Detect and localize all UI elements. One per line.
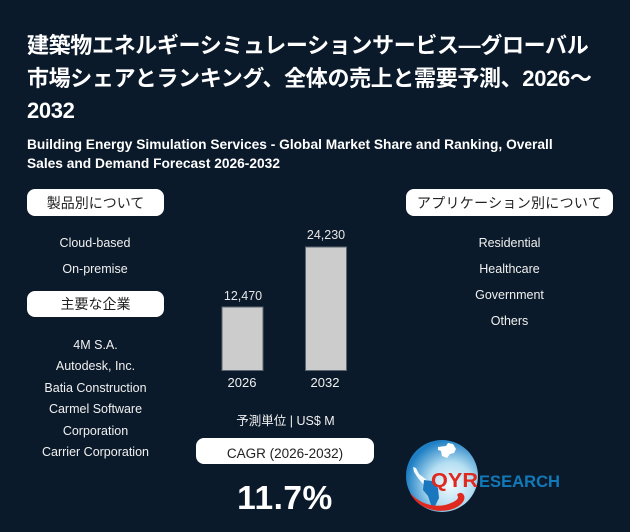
company list: Corporation bbox=[63, 424, 128, 438]
subtitle: Building Energy Simulation Services - Global Market Share and Ranking, Overall bbox=[27, 136, 553, 152]
title: 2032 bbox=[27, 98, 75, 123]
bar: 2032: 24,230 bbox=[307, 228, 345, 242]
bar chart bbox=[222, 228, 347, 390]
bar: 2032 bbox=[306, 228, 346, 390]
product: on-premise: On-premise bbox=[62, 262, 128, 276]
title: 市場シェアとランキング、全体の売上と需要予測、2026～ bbox=[27, 66, 592, 90]
bar: 2032: 2032 bbox=[311, 375, 339, 390]
company list: Autodesk, Inc. bbox=[56, 359, 135, 373]
CAGR value: 11.7% bbox=[237, 480, 333, 517]
pill: CAGR bbox=[196, 438, 374, 464]
globe bbox=[406, 440, 478, 512]
bar: 2026 bbox=[222, 289, 263, 390]
pill: by product: 製品別について bbox=[47, 195, 144, 211]
logo: QYResearch: ESEARCH bbox=[479, 473, 560, 491]
subtitle bbox=[27, 136, 553, 171]
pill: CAGR: CAGR (2026-2032) bbox=[227, 446, 343, 461]
pill: key companies: 主要な企業 bbox=[60, 296, 130, 312]
application: healthcare: Healthcare bbox=[479, 262, 540, 276]
product list bbox=[60, 236, 130, 276]
company list: Carmel Software bbox=[49, 402, 142, 416]
company list bbox=[42, 338, 149, 459]
logo: QYResearch bbox=[406, 440, 560, 512]
pill: by application: アプリケーション別について bbox=[417, 195, 602, 211]
title: 建築物エネルギーシミュレーションサービス—グローバル bbox=[27, 33, 588, 58]
pill: key companies bbox=[27, 291, 164, 317]
forecast unit: 予測単位 | US$ M bbox=[236, 414, 335, 428]
title bbox=[27, 33, 592, 123]
bar: 2026: 2026 bbox=[228, 375, 256, 390]
subtitle: Sales and Demand Forecast 2026-2032 bbox=[27, 156, 280, 171]
application: others: Others bbox=[491, 314, 528, 328]
company list: 4M S.A. bbox=[73, 338, 118, 352]
application: residential: Residential bbox=[479, 236, 540, 250]
application: government: Government bbox=[475, 288, 544, 302]
company list: Batia Construction bbox=[44, 380, 147, 394]
application list bbox=[475, 236, 544, 328]
company list: Carrier Corporation bbox=[42, 445, 149, 459]
logo: QYResearch: QYR bbox=[431, 469, 478, 492]
pill: by product bbox=[27, 189, 164, 216]
red swoosh bbox=[410, 493, 464, 511]
pill: by application bbox=[406, 189, 613, 216]
bar: 2026: 12,470 bbox=[224, 289, 262, 303]
product: cloud-based: Cloud-based bbox=[60, 236, 130, 250]
